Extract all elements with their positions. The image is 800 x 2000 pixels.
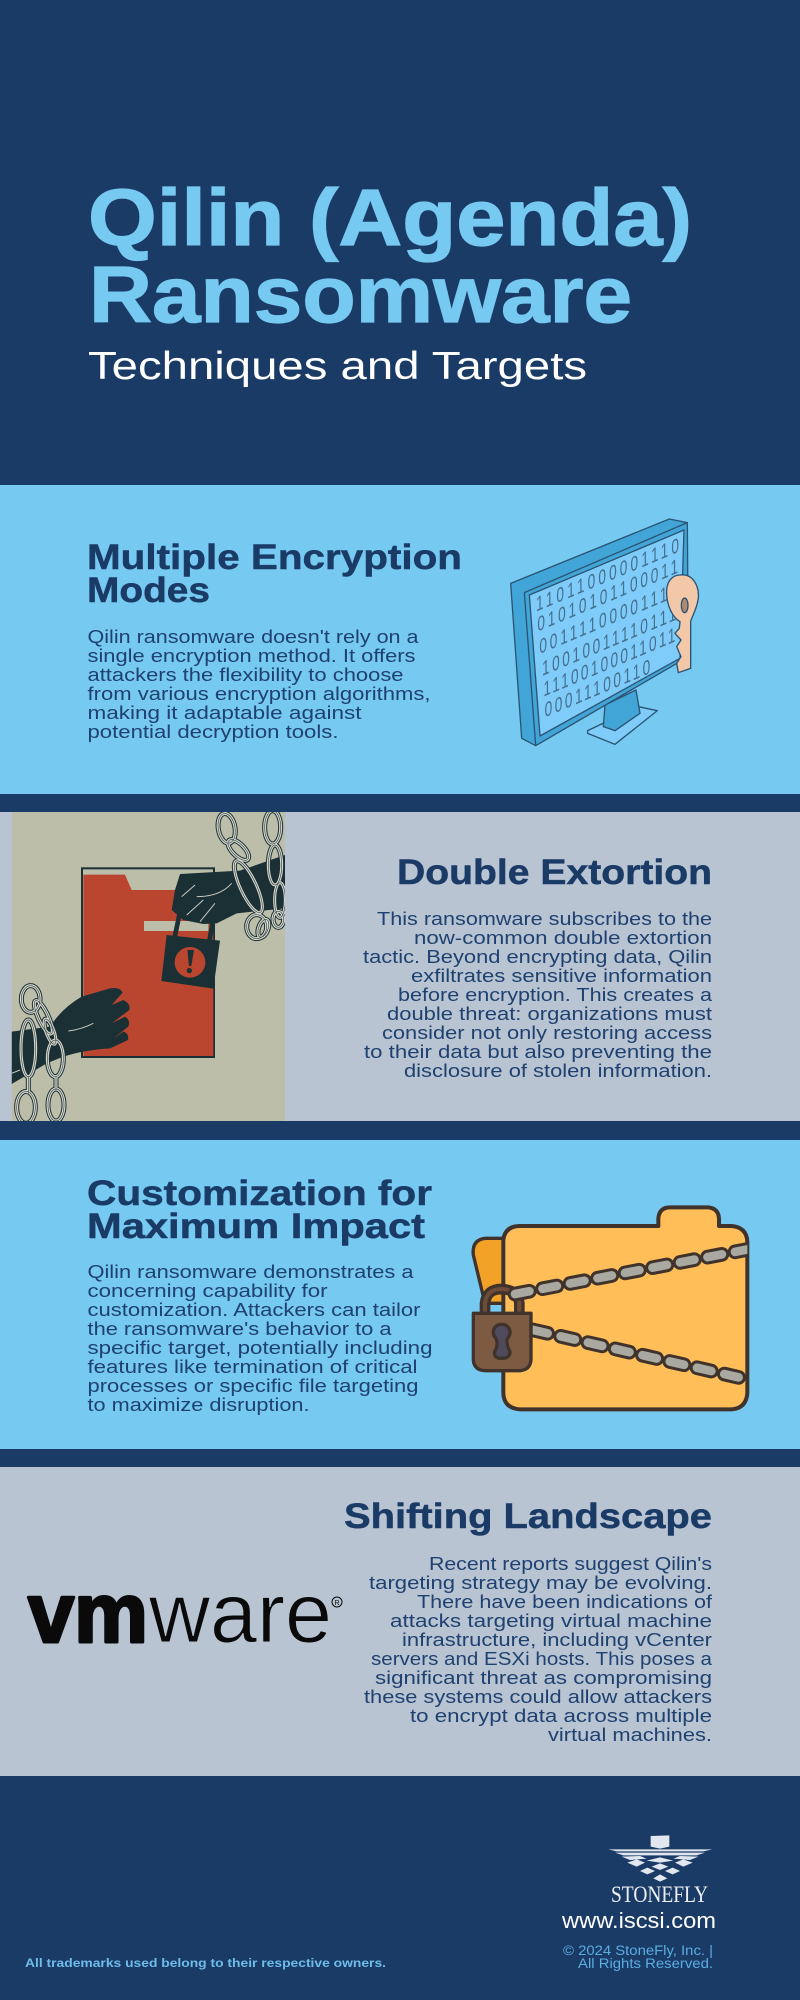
copyright: All Rights Reserved.	[578, 1955, 713, 1971]
text block: shifting landscape description: attacks targeting virtual machine	[390, 1610, 712, 1631]
text block: shifting landscape description: There have been indications of	[417, 1591, 713, 1612]
heading: customization for maximum impact: Customization for	[87, 1174, 432, 1213]
text block: double extortion description	[363, 908, 713, 1081]
title: Ransomware	[89, 250, 632, 339]
text block: encryption description	[88, 626, 430, 742]
panel: customization	[0, 1140, 800, 1449]
panel: double extortion	[0, 811, 800, 1123]
text block: encryption description: Qilin ransomware doesn't rely on a	[88, 626, 419, 647]
text block: double extortion description: now-common double extortion	[414, 927, 712, 948]
text block: encryption description: potential decryption tools.	[88, 721, 338, 742]
text block: shifting landscape description: targeting strategy may be evolving.	[369, 1572, 712, 1593]
subtitle: Techniques and Targets	[88, 345, 587, 388]
icon: monitor with binary and key: 10010011110111	[542, 601, 676, 681]
text block: customization description: to maximize disruption.	[88, 1394, 310, 1415]
panel: shifting landscape	[0, 1467, 800, 1776]
text block: customization description: the ransomware's behavior to a	[88, 1318, 392, 1339]
icon: monitor with binary and key: 00111100001111	[539, 578, 677, 659]
icon: monitor with binary and key: 11011000001110	[536, 533, 679, 616]
text block: shifting landscape description: infrastructure, including vCenter	[402, 1629, 712, 1650]
text block: double extortion description: to their data but also preventing the	[364, 1041, 712, 1062]
text block: double extortion description: consider not only restoring access	[382, 1022, 712, 1043]
panel: multiple encryption modes	[0, 485, 800, 794]
text block: shifting landscape description: these systems could allow attackers	[364, 1686, 712, 1707]
logo: vmware: ware	[148, 1566, 332, 1660]
heading: multiple encryption modes	[87, 538, 462, 610]
text block: double extortion description: This ransomware subscribes to the	[377, 908, 712, 929]
text block: shifting landscape description	[364, 1553, 713, 1745]
text block: customization description: processes or specific file targeting	[88, 1375, 418, 1396]
text block: encryption description: from various encryption algorithms,	[88, 683, 430, 704]
copyright	[563, 1942, 713, 1971]
icon: monitor with binary and key: 11100100011011	[543, 623, 675, 701]
text block: encryption description: making it adaptable against	[88, 702, 362, 723]
footer	[25, 1835, 716, 1971]
text block: shifting landscape description: Recent reports suggest Qilin's	[429, 1553, 712, 1574]
header: title block	[88, 173, 692, 388]
text block: encryption description: single encryption method. It offers	[88, 645, 415, 666]
illustration: chained hands on red folder	[12, 811, 285, 1123]
text block: customization description	[88, 1261, 432, 1415]
text block: customization description: Qilin ransomware demonstrates a	[88, 1261, 414, 1282]
text block: encryption description: attackers the flexibility to choose	[88, 664, 404, 685]
title	[88, 173, 692, 339]
text block: double extortion description: tactic. Beyond encrypting data, Qilin	[363, 946, 712, 967]
text block: shifting landscape description: virtual machines.	[548, 1724, 712, 1745]
heading: multiple encryption modes: Modes	[87, 571, 210, 610]
heading: double extortion: Double Extortion	[397, 853, 712, 892]
heading: multiple encryption modes: Multiple Encryption	[87, 538, 462, 577]
text block: double extortion description: double threat: organizations must	[387, 1003, 712, 1024]
icon: monitor with binary and key: 00011100110	[545, 655, 650, 722]
logo: vmware	[28, 1566, 342, 1660]
icon: monitor with binary and key: 01010101100011	[537, 554, 678, 636]
copyright: © 2024 StoneFly, Inc. |	[563, 1942, 713, 1958]
trademark note: All trademarks used belong to their respective owners.	[25, 1956, 386, 1970]
heading: shifting landscape: Shifting Landscape	[344, 1497, 712, 1536]
text block: customization description: features like termination of critical	[88, 1356, 418, 1377]
text block: double extortion description: exfiltrates sensitive information	[411, 965, 712, 986]
icon: monitor with binary and key	[511, 519, 698, 746]
heading: customization for maximum impact: Maximum Impact	[87, 1207, 425, 1246]
text block: double extortion description: disclosure of stolen information.	[404, 1060, 712, 1081]
icon: chained folder with padlock	[473, 1207, 752, 1409]
logo: vmware: vm	[28, 1566, 148, 1660]
logo: stonefly: STONEFLY	[611, 1882, 708, 1907]
title: Qilin (Agenda)	[88, 173, 692, 262]
text block: shifting landscape description: significant threat as compromising	[375, 1667, 712, 1688]
text block: shifting landscape description: servers and ESXi hosts. This poses a	[371, 1648, 713, 1669]
text block: double extortion description: before encryption. This creates a	[398, 984, 713, 1005]
text block: shifting landscape description: to encrypt data across multiple	[410, 1705, 712, 1726]
heading: customization for maximum impact	[87, 1174, 432, 1246]
logo: stonefly	[608, 1835, 712, 1907]
logo: vmware: R	[334, 1600, 340, 1607]
text block: customization description: concerning capability for	[88, 1280, 328, 1301]
text block: customization description: specific target, potentially including	[88, 1337, 432, 1358]
text block: customization description: customization. Attackers can tailor	[88, 1299, 421, 1320]
website: www.iscsi.com	[561, 1908, 716, 1933]
